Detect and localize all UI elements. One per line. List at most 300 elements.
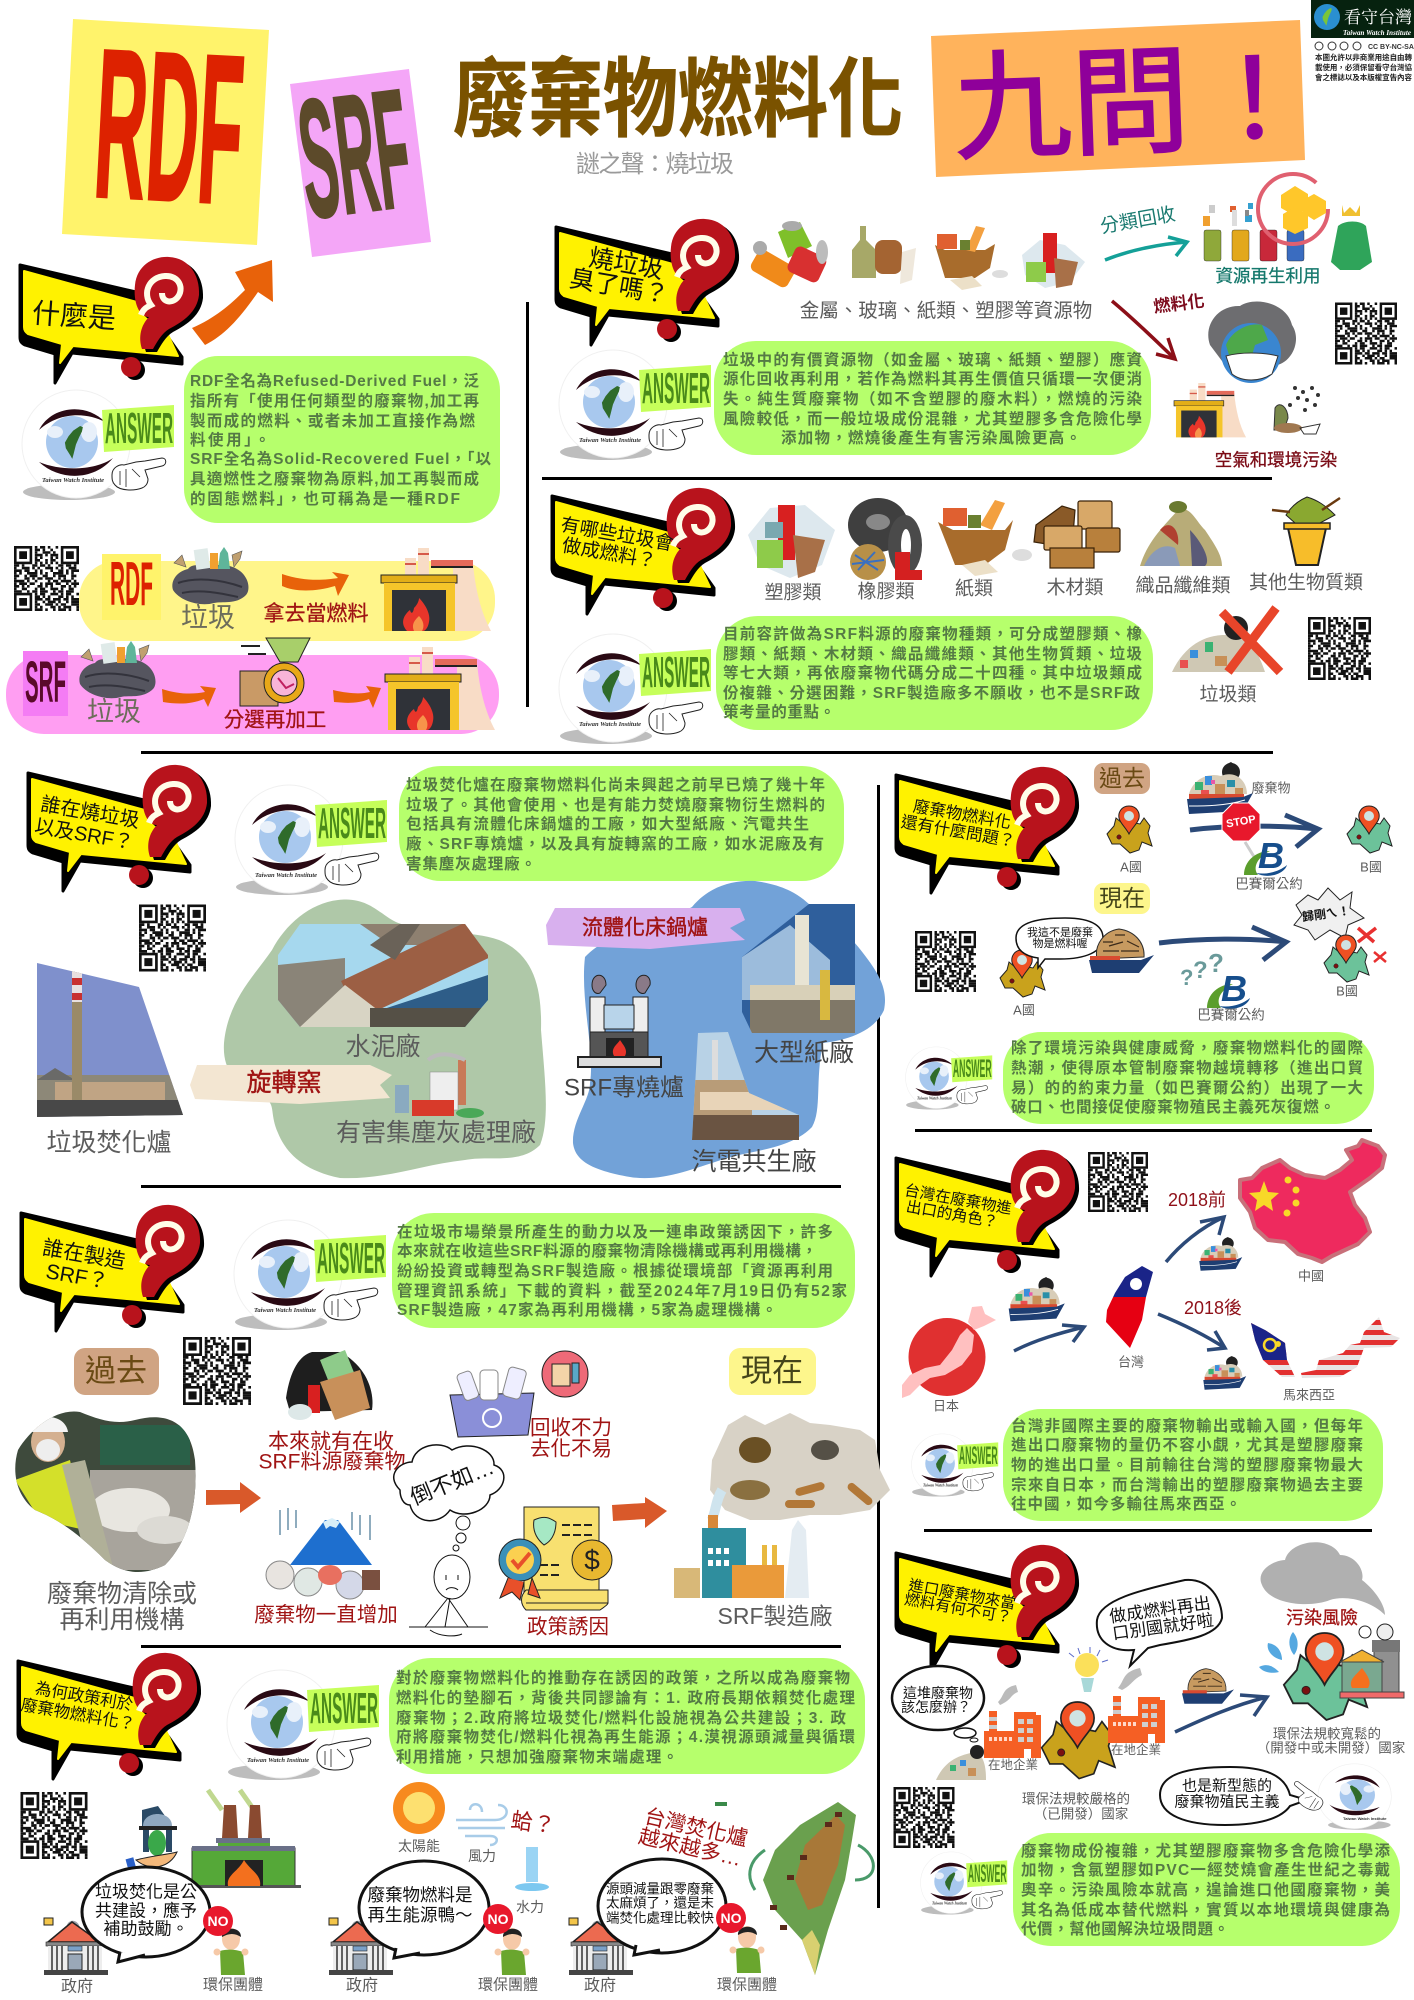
answer logo: Taiwan Watch Institute — [923, 1483, 959, 1487]
country A with speech — [1000, 918, 1103, 1018]
SRF process row: SRF — [25, 650, 66, 715]
speech bubble: export — [1097, 1580, 1222, 1666]
answer text — [716, 616, 1153, 730]
logo and license: 載使用，必須保留看守台灣協 — [1315, 62, 1412, 72]
question bubble: importing — [896, 1545, 1079, 1671]
STOP sign: STOP — [1225, 814, 1257, 830]
label: 廢棄物清除或 — [47, 1580, 197, 1608]
label: 汽電共生廠 — [691, 1148, 817, 1176]
answer text: 製而成的燃料、或者未加工直接作為燃 — [190, 411, 475, 430]
icon: wood — [1034, 501, 1120, 568]
RDF process row: 垃圾 — [181, 603, 235, 633]
icon: garbage mountain — [266, 1508, 380, 1599]
factory right — [1108, 1668, 1165, 1743]
arrow: blocked — [1190, 815, 1318, 847]
labels: 環保團體 — [717, 1976, 777, 1994]
panel: does burning stink: ANSWER — [642, 364, 710, 413]
developed country with pin — [1042, 1702, 1115, 1779]
country B angry — [1324, 928, 1386, 998]
question bubble: burn: 臭了嗎？ — [567, 265, 671, 309]
answer text: 對於廢棄物燃料化的推動存在誘因的政策，之所以成為廢棄物 — [396, 1668, 850, 1687]
photo: SRF pellets — [710, 1413, 890, 1520]
question bubble: which — [552, 488, 735, 614]
answer text — [184, 356, 500, 523]
icon: policy document — [499, 1507, 612, 1610]
banner: nine questions — [931, 20, 1311, 177]
SRF process row — [6, 638, 499, 734]
label: 木材類 — [1046, 576, 1104, 598]
icon: wind — [456, 1804, 507, 1845]
answer text: 具適燃性之廢棄物為原料,加工再製而成 — [190, 469, 479, 488]
badge: past: 過去 — [85, 1354, 147, 1388]
question bubble: why policy — [18, 1653, 201, 1779]
labels: 環保團體 — [478, 1976, 538, 1994]
NGO person 2: NO — [488, 1911, 509, 1927]
answer text: 份複雜、分選困難，SRF製造廠多不願收，也不是SRF政 — [723, 683, 1140, 702]
photo: incinerator chimney — [37, 960, 187, 1120]
Basel logo: B — [1258, 835, 1284, 876]
icon: garbage bags and box — [286, 1350, 373, 1420]
answer text: 燃料化的墊腳石，背後共同謬論有：1. 政府長期依賴焚化處理 — [396, 1688, 855, 1707]
arrow — [1014, 1325, 1084, 1351]
SRF process row: 分選再加工 — [224, 708, 326, 732]
QR code — [894, 1787, 954, 1848]
label: 橡膠類 — [857, 580, 915, 602]
QR code — [915, 931, 976, 992]
answer text: 紛紛投資或轉型為SRF製造廠。根據從環境部「資源再利用 — [397, 1261, 833, 1280]
NGO person 3: NO — [720, 1910, 742, 1926]
scenario 3: government speech: 源頭減量跟零廢棄 — [606, 1880, 714, 1896]
badge: now: 現在 — [741, 1354, 803, 1388]
panel: importing waste as fuel: ANSWER — [968, 1860, 1007, 1888]
icon: rubber — [848, 498, 922, 580]
icon: green incinerator — [192, 1790, 301, 1888]
arrow — [206, 1482, 261, 1513]
labels: 政府 — [61, 1978, 93, 1996]
arrow: recycle — [1105, 237, 1187, 260]
question bubble: who makes — [21, 1205, 204, 1331]
answer logo — [234, 1220, 386, 1330]
arrow — [612, 1497, 667, 1528]
label: 在地企業 — [988, 1757, 1038, 1772]
photo: rotary kiln — [278, 924, 488, 1027]
label: 台灣 — [1118, 1354, 1144, 1370]
answer text: 宗來自日本，而台灣輸出的塑膠廢棄物過去主要 — [1011, 1475, 1363, 1494]
answer text: 利用措施，只想加強廢棄物末端處理。 — [396, 1747, 678, 1766]
answer text: 失。純生質廢棄物（如不含塑膠的廢木料），燃燒的污染 — [723, 389, 1142, 408]
blob: rotary kiln group — [190, 899, 546, 1178]
panel: what is RDF SRF — [6, 257, 500, 734]
label: after 2018: 2018後 — [1184, 1298, 1242, 1318]
panel: other problems — [896, 762, 1392, 1124]
Basel logo — [1235, 835, 1303, 892]
answer text: 害集塵灰處理廠。 — [406, 854, 536, 873]
answer text: SRF全名為Solid-Recovered Fuel，「以 — [190, 450, 491, 468]
answer text: 垃圾了。其他會使用、也是有能力焚燒廢棄物衍生燃料的 — [406, 795, 825, 814]
scenario 2: government speech — [329, 1861, 489, 1975]
burst exclamation: 歸剛ㄟ！ — [1301, 903, 1351, 924]
arrow — [1166, 1217, 1224, 1262]
RDF process row: 拿去當燃料 — [264, 602, 368, 626]
answer text: 奧辛。污染風險本就高，遑論進口他國廢棄物，美 — [1021, 1880, 1390, 1899]
answer text: SRF製造廠，47家為再利用機構，5家為處理機構。 — [397, 1300, 777, 1319]
Basel logo — [1197, 968, 1265, 1022]
label: strict country — [1022, 1792, 1130, 1822]
label — [530, 1416, 612, 1460]
label: fuelization: 燃料化 — [1153, 291, 1205, 317]
answer logo: Taiwan Watch Institute — [579, 437, 641, 444]
question marks: ? — [1193, 957, 1208, 984]
scenario 3: government speech: 太麻煩了，還是末 — [606, 1896, 714, 1910]
QR code — [14, 546, 79, 611]
panel: who makes SRF: ANSWER — [317, 1234, 385, 1283]
country B — [1347, 806, 1392, 874]
icon: bank and hand — [126, 1806, 177, 1879]
QR code — [183, 1337, 251, 1405]
label — [258, 1430, 406, 1474]
label: more incinerators: 台灣焚化爐 — [642, 1805, 750, 1851]
question marks: ? — [1180, 965, 1193, 990]
banner: nine questions: ！ — [1197, 37, 1311, 164]
QR code — [1335, 302, 1397, 364]
country B angry: B國 — [1336, 984, 1358, 998]
question marks — [1180, 948, 1224, 990]
question bubble: who makes: SRF？ — [44, 1260, 110, 1294]
answer text: 其名為低成本替代燃料，實質以本地環境與健康為 — [1021, 1900, 1390, 1919]
labels: 環保團體 — [203, 1976, 263, 1994]
icon: drops — [1259, 1632, 1298, 1673]
logo and license: 本圖允許以非商業用途自由轉 — [1315, 52, 1412, 62]
panel: which waste becomes fuel: ANSWER — [642, 648, 710, 697]
panel: who makes SRF — [10, 1205, 890, 1638]
thought bubble — [394, 1445, 504, 1551]
answer logo — [906, 1047, 992, 1110]
answer text: 料使用」。 — [190, 431, 270, 449]
Basel logo: 巴賽爾公約 — [1197, 1006, 1265, 1022]
garbage pile — [936, 1745, 986, 1780]
answer text: 指所有「使用任何類型的廢棄物,加工再 — [190, 391, 479, 410]
answer logo: Taiwan Watch Institute — [579, 721, 641, 728]
sticky note: RDF — [62, 4, 269, 249]
scenario 2: government speech: 廢棄物燃料是 — [368, 1885, 472, 1905]
panel: what is RDF SRF: ANSWER — [105, 404, 173, 453]
label: 回收不力 — [530, 1416, 612, 1440]
label: 廢棄物一直增加 — [254, 1604, 398, 1626]
answer logo — [912, 1434, 998, 1497]
blob: fluidized bed group — [546, 881, 885, 1178]
panel: which waste becomes fuel — [552, 488, 1371, 744]
label: 日本 — [933, 1398, 959, 1414]
burst exclamation — [1294, 888, 1364, 940]
answer text — [399, 766, 844, 881]
label: 本來就有在收 — [268, 1430, 394, 1454]
badge: past — [1094, 763, 1150, 794]
panel: who burns: ANSWER — [318, 799, 386, 848]
text: RDF — [90, 4, 249, 249]
answer text: 代價，幫他國解決垃圾問題。 — [1021, 1919, 1229, 1938]
answer logo: Taiwan Watch Institute — [917, 1096, 953, 1100]
scenario 1: government speech — [44, 1867, 210, 1975]
answer logo: Taiwan Watch Institute — [254, 1307, 316, 1314]
scenario 1: government speech: 補助鼓勵。 — [104, 1920, 188, 1938]
labels — [346, 1976, 538, 1994]
icon: glass jars — [852, 226, 916, 284]
answer logo — [921, 1852, 1007, 1915]
answer text: 垃圾焚化爐在廢棄物燃料化尚未興起之前早已燒了幾十年 — [406, 775, 825, 794]
scenario 2: government speech: 再生能源鴨～ — [368, 1905, 472, 1925]
label: 再利用機構 — [59, 1606, 185, 1634]
badge: past — [74, 1348, 159, 1395]
icon: hazardous ash plant — [395, 1054, 484, 1118]
answer text: 的固態燃料」，也可稱為是一種RDF — [190, 490, 460, 508]
map: Taiwan flag — [1106, 1266, 1153, 1348]
label: huh: 蛤？ — [509, 1808, 557, 1838]
icon: SRF incinerator — [578, 975, 661, 1067]
answer text: 膠類、紙類、木材類、織品纖維類、其他生物質類、垃圾 — [723, 644, 1142, 663]
STOP sign — [1222, 803, 1260, 860]
answer text: 添加物，燃燒後產生有害污染風險更高。 — [781, 428, 1081, 447]
answer text — [389, 1658, 865, 1774]
NGO person 2 — [483, 1904, 530, 1975]
label: 太陽能 — [398, 1838, 440, 1854]
question bubble: other problems: 還有什麼問題？ — [900, 812, 1017, 851]
label: 有害集塵灰處理廠 — [336, 1119, 536, 1147]
country B: B國 — [1360, 860, 1382, 874]
text: SRF — [289, 54, 420, 254]
NGO person 3 — [716, 1903, 764, 1973]
icon: recycling basket — [450, 1366, 534, 1437]
question bubble: importing: 燃料有何不可？ — [903, 1590, 1013, 1627]
badge: now: 現在 — [1099, 885, 1145, 911]
label: strict country: 環保法規較嚴格的 — [1022, 1792, 1130, 1806]
label: 去化不易 — [530, 1438, 612, 1460]
speech bubble: export: 口別國就好啦 — [1111, 1610, 1215, 1644]
country A — [1107, 806, 1152, 874]
Basel logo: B — [1221, 968, 1247, 1009]
answer logo — [559, 350, 711, 460]
country A: A國 — [1120, 860, 1142, 874]
arrow: to title notes — [192, 260, 273, 345]
banner: fluidized bed: 流體化床鍋爐 — [582, 916, 708, 940]
answer text: 府將廢棄物焚化/燃料化視為再生能源；4.漠視源頭減量與循環 — [396, 1727, 855, 1746]
icon: textiles — [1140, 501, 1222, 566]
question bubble: who burns: 誰在燒垃圾 — [39, 792, 141, 833]
question bubble: other problems: 廢棄物燃料化 — [912, 797, 1012, 832]
ship with waste — [1187, 762, 1291, 814]
panel: other problems: ANSWER — [953, 1055, 992, 1083]
label: pollution: 空氣和環境污染 — [1215, 450, 1337, 470]
label: strict country: （已開發）國家 — [1034, 1806, 1129, 1822]
map: China — [1240, 1140, 1385, 1262]
QR code — [1088, 1152, 1148, 1212]
QR code — [139, 904, 206, 972]
label: 大型紙廠 — [754, 1039, 854, 1067]
question bubble: what is — [20, 257, 203, 383]
label: 馬來西亞 — [1283, 1388, 1335, 1402]
photo: paper plant — [742, 904, 855, 1034]
icon: polluted earth — [1208, 302, 1296, 383]
answer text — [1013, 1833, 1400, 1946]
thought bubble: 這堆廢棄物 — [903, 1685, 973, 1701]
label: 政策誘因 — [527, 1616, 609, 1638]
answer text: 等七大類，再依廢棄物代碼分成二十四種。其中垃圾類成 — [723, 663, 1142, 682]
answer logo: Taiwan Watch Institute — [42, 477, 104, 484]
RDF process row — [79, 547, 495, 641]
badge: now — [1094, 883, 1150, 914]
icon: paper box — [935, 226, 1008, 290]
label: 金屬、玻璃、紙類、塑膠等資源物 — [800, 300, 1092, 322]
ship — [1203, 1356, 1246, 1390]
question marks: ? — [1208, 948, 1224, 978]
logo and license — [1311, 0, 1414, 82]
banner: nine questions: 九問 — [951, 36, 1192, 176]
panel: who burns — [28, 765, 885, 1178]
icon: thinking stick figure — [409, 1555, 488, 1636]
label: 其他生物質類 — [1249, 572, 1363, 594]
question bubble: why policy: 廢棄物燃料化？ — [20, 1695, 137, 1734]
banner: fluidized bed — [546, 908, 745, 949]
country A with speech: 物是燃料喔 — [1032, 936, 1088, 950]
label: more incinerators — [636, 1805, 750, 1871]
icon: light bulb — [1069, 1647, 1108, 1692]
icon: recycle bins — [1203, 174, 1372, 270]
label: resource reuse: 資源再生利用 — [1216, 266, 1320, 286]
NGO person 1 — [203, 1906, 248, 1975]
icon: thumbs down — [542, 1351, 588, 1397]
QR code — [20, 1792, 88, 1859]
answer text: 本來就在收這些SRF料源的廢棄物清除機構或再利用機構， — [397, 1241, 817, 1260]
label: before 2018: 2018前 — [1168, 1190, 1226, 1210]
speech bubble: export: 做成燃料再出 — [1108, 1593, 1212, 1627]
answer text: 進出口廢棄物的量仍不容小覷，尤其是塑膠廢棄 — [1011, 1435, 1363, 1454]
NGO person 1: NO — [208, 1913, 229, 1929]
label: more incinerators: 越來越多… — [636, 1825, 744, 1871]
labels: 政府 — [584, 1976, 616, 1994]
answer text: 熱潮，使得原本管制廢棄物越境轉移（進出口貿 — [1011, 1058, 1363, 1077]
question bubble: who burns: 以及SRF？ — [33, 815, 135, 855]
answer logo: Taiwan Watch Institute — [932, 1901, 968, 1905]
ship with fuel — [1182, 1669, 1234, 1704]
small logo — [1285, 1764, 1391, 1830]
answer text: 廢棄物；2.政府將垃圾焚化/燃料化設施視為公共建設；3. 政 — [396, 1708, 846, 1727]
icon: water — [515, 1847, 549, 1891]
badge: past: 過去 — [1099, 765, 1145, 791]
icon: pollution particles — [1274, 386, 1320, 434]
icon: plastics — [1022, 233, 1085, 288]
label: lax country — [1257, 1726, 1406, 1756]
label: lax country: 環保法規較寬鬆的 — [1273, 1726, 1381, 1742]
scenario 1: government speech: 垃圾焚化是公 — [95, 1882, 197, 1902]
logo and license: 會之標誌以及本版權宣告內容 — [1315, 72, 1412, 82]
question bubble: other problems — [896, 767, 1079, 893]
map: Malaysia — [1251, 1317, 1400, 1378]
question bubble: importing: 進口廢棄物來當 — [907, 1575, 1017, 1613]
answer logo: Taiwan Watch Institute — [255, 872, 317, 879]
thought bubble: 該怎麼辦？ — [901, 1699, 971, 1715]
answer text: 風險較低，而一般垃圾成份混雜，尤其塑膠多含危險化學 — [723, 409, 1142, 428]
icon: policy document: $ — [584, 1544, 600, 1576]
ship — [1009, 1277, 1065, 1321]
Basel logo: 巴賽爾公約 — [1235, 876, 1303, 892]
arrow — [1159, 927, 1286, 960]
question bubble: who burns — [28, 765, 211, 891]
label: 中國 — [1298, 1268, 1324, 1284]
label: 塑膠類 — [764, 582, 822, 604]
answer logo — [235, 785, 387, 895]
arrow — [1175, 1695, 1267, 1732]
answer text: 台灣非國際主要的廢棄物輸出或輸入國，但每年 — [1011, 1416, 1363, 1435]
small logo: Taiwan Watch Institute — [1343, 1817, 1387, 1821]
label: SRF料源廢棄物 — [258, 1450, 406, 1474]
answer text: 易）的的約束力量（如巴賽爾公約）出現了一大 — [1011, 1078, 1363, 1097]
country A with speech: 我這不是廢棄 — [1027, 925, 1093, 939]
answer text: 目前容許做為SRF料源的廢棄物種類，可分成塑膠類、橡 — [723, 624, 1142, 643]
subtitle: 謎之聲：燒垃圾 — [576, 151, 734, 178]
QR code — [1308, 617, 1371, 680]
speech bubble: waste colonialism: 也是新型態的 — [1182, 1778, 1272, 1794]
panel: why policy favors: ANSWER — [310, 1684, 378, 1733]
icon: sun — [393, 1782, 445, 1834]
answer text — [392, 1213, 855, 1328]
label: 在地企業 — [1111, 1742, 1161, 1757]
answer logo — [227, 1670, 379, 1780]
thought bubble: 倒不如… — [407, 1454, 497, 1510]
country A with speech: A國 — [1013, 1002, 1035, 1018]
icon: Taiwan map — [715, 1802, 873, 1975]
SRF process row: 垃圾 — [87, 697, 141, 727]
label: SRF製造廠 — [718, 1603, 832, 1629]
icon: plastic — [748, 505, 835, 578]
scenario 3: government speech: 端焚化處理比較快 — [606, 1910, 714, 1926]
answer text: 管理資訊系統」下載的資料，截至2024年7月19日仍有52家 — [397, 1281, 847, 1300]
photo: cogeneration plant — [692, 1030, 802, 1142]
arrow: fuelization — [1112, 301, 1175, 359]
answer logo: Taiwan Watch Institute — [247, 1757, 309, 1764]
answer text: 垃圾中的有價資源物（如金屬、玻璃、紙類、塑膠）應資 — [723, 350, 1142, 369]
country with pin and furnace — [1284, 1624, 1404, 1720]
scenario 1: government speech: 共建設，應予 — [95, 1900, 197, 1920]
icon: cans — [749, 221, 828, 289]
answer text: 廢棄物成份複雜，尤其塑膠廢棄物多含危險化學添 — [1021, 1841, 1390, 1860]
icon: small furnace — [1174, 383, 1246, 437]
speech bubble: waste colonialism — [1160, 1767, 1307, 1825]
icon: garbage crossed out — [1172, 608, 1280, 672]
panel: Taiwan trade role: ANSWER — [959, 1442, 998, 1470]
answer text — [714, 341, 1151, 455]
logo and license: 看守台灣 — [1344, 8, 1412, 27]
sticky note: SRF — [289, 54, 431, 257]
labels: 政府 — [346, 1976, 378, 1994]
label: 垃圾類 — [1199, 684, 1257, 706]
label: 水泥廠 — [345, 1033, 421, 1061]
ship — [1199, 1237, 1242, 1271]
answer text — [1003, 1032, 1374, 1124]
answer text: 廠、SRF專燒爐，以及具有旋轉窯的工廠，如水泥廠及有 — [406, 834, 824, 853]
answer text — [1003, 1409, 1383, 1521]
ship with fuel — [1089, 929, 1154, 973]
label: 紙類 — [955, 578, 993, 600]
badge: now — [729, 1348, 816, 1395]
icon: plant — [1272, 497, 1340, 565]
icon: sorting machine — [240, 638, 310, 706]
labels — [61, 1976, 263, 1996]
label: 織品纖維類 — [1135, 574, 1231, 596]
map: Japan — [902, 1306, 996, 1398]
thought bubble — [892, 1666, 984, 1742]
speech bubble: waste colonialism: 廢棄物殖民主義 — [1174, 1792, 1280, 1810]
question bubble: Taiwan role: 出口的角色？ — [905, 1198, 999, 1231]
icon: paper — [938, 500, 1032, 576]
